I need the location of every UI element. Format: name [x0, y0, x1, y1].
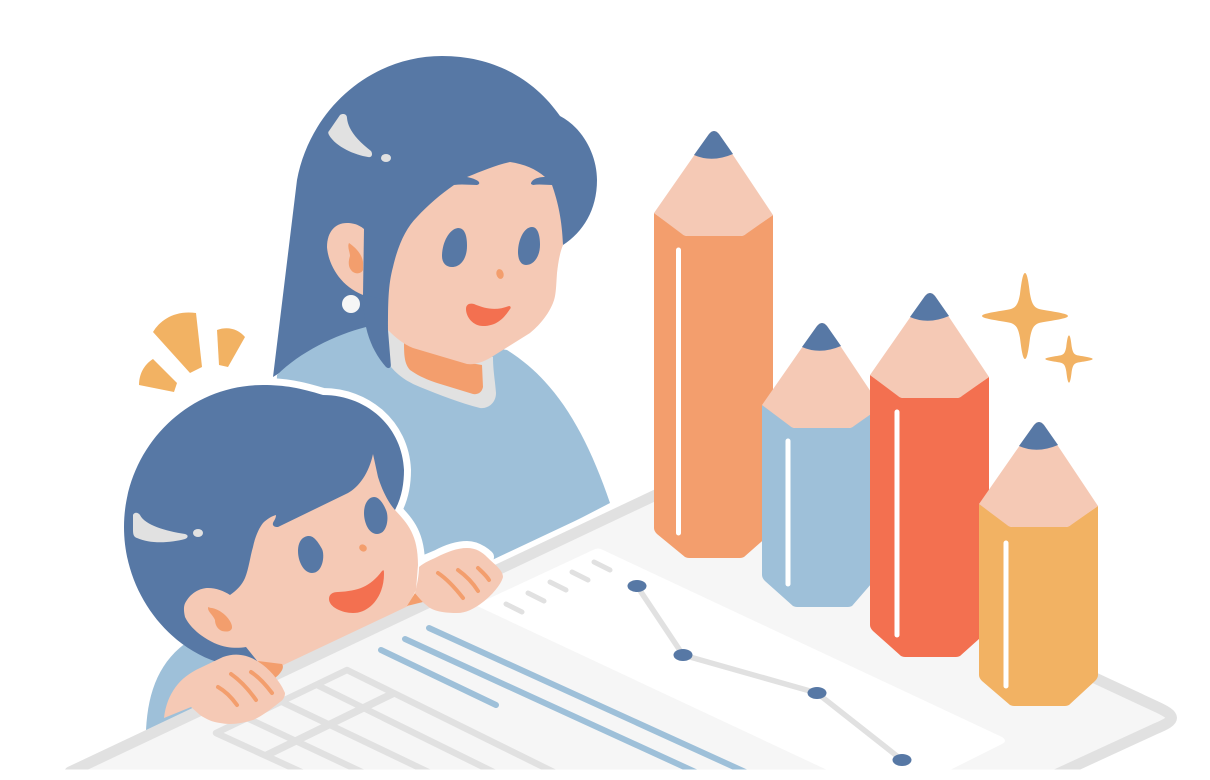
child hair highlight: [133, 513, 188, 542]
child face: [184, 454, 418, 668]
child neck right: [407, 593, 423, 606]
mother ear: [327, 223, 364, 295]
sparkle lines: [139, 312, 245, 392]
pencil: yellow: [979, 422, 1098, 706]
mother figure: [270, 56, 610, 560]
finger lines: [218, 672, 272, 705]
white divider behind board: [493, 517, 583, 560]
mother face: [388, 162, 563, 364]
child right hand: [415, 548, 503, 613]
icon: small sparkle star: [1045, 335, 1093, 383]
data table: [212, 666, 556, 770]
child neck left: [258, 661, 283, 678]
child eyes: [298, 497, 387, 573]
pencil: red: [870, 293, 989, 657]
mother earring: [342, 295, 360, 313]
child mouth: [329, 570, 384, 613]
sheet header dashes: [506, 562, 610, 612]
text bars: [381, 628, 765, 780]
report sheet: [475, 548, 1005, 780]
pencil: orange: [654, 131, 773, 558]
child hair highlight dot: [193, 529, 203, 537]
child left hand: [164, 655, 285, 724]
child nose: [359, 544, 367, 552]
child inner ear: [208, 607, 232, 632]
mother hair highlight dot: [381, 154, 391, 162]
finger lines: [438, 568, 489, 598]
mother hair highlight: [328, 114, 372, 157]
icon: large sparkle star: [982, 273, 1068, 359]
mother inner ear: [348, 243, 363, 273]
mother mouth: [466, 304, 511, 326]
mother neck: [404, 343, 483, 394]
child outline: [276, 378, 494, 560]
pencil: blue: [762, 323, 881, 607]
mother hair strand: [366, 327, 391, 368]
line chart: [628, 580, 912, 766]
child shirt: [146, 644, 214, 730]
mother collar: [388, 330, 496, 408]
board: [70, 484, 1172, 780]
mother hair back: [273, 56, 597, 377]
mother shirt: [270, 327, 610, 560]
mother nose: [496, 269, 504, 279]
child hair: [124, 385, 404, 662]
mother eyes: [442, 227, 540, 267]
